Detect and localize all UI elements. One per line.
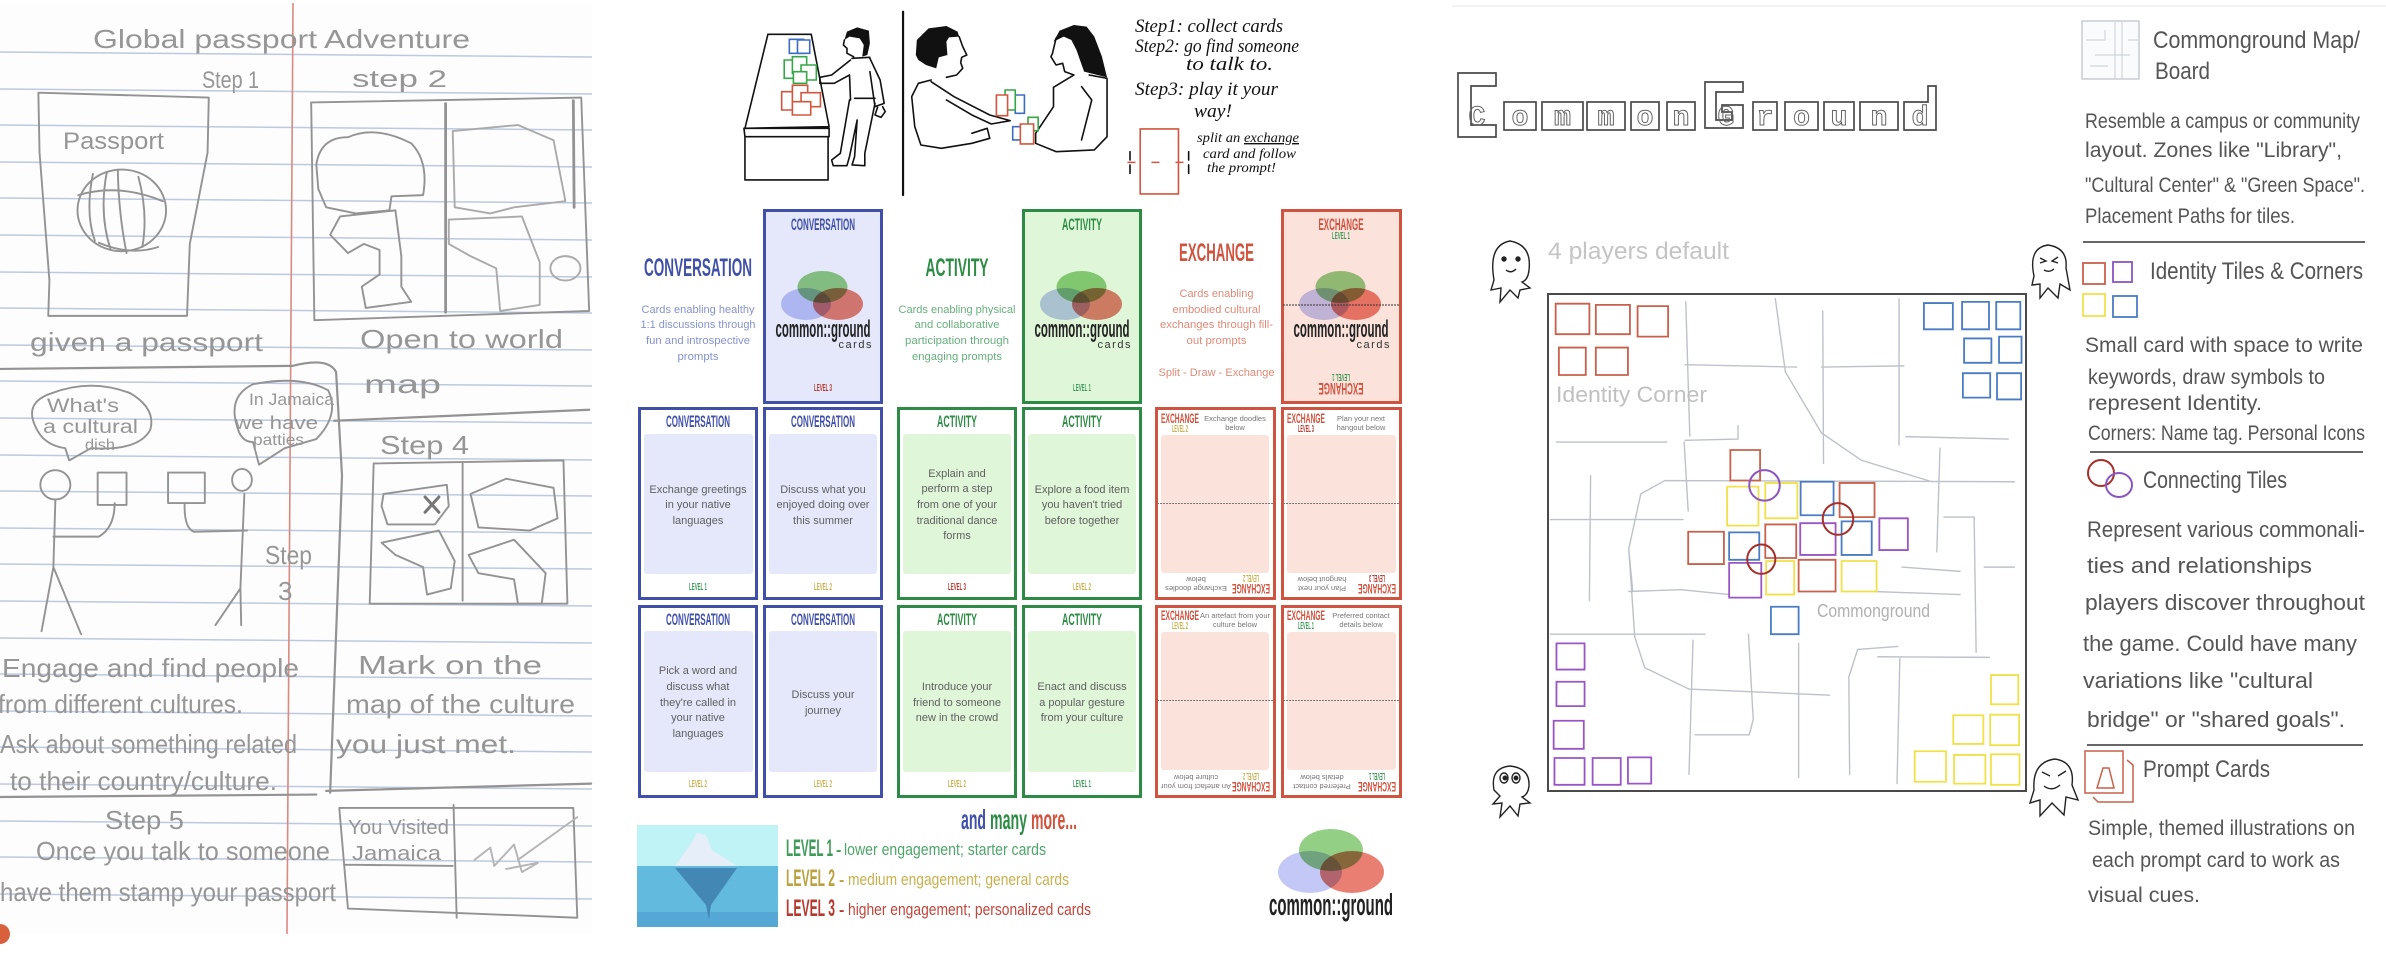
legend: game components list (2082, 21, 2365, 907)
card: exchange greetings: Exchange greetings (649, 484, 747, 496)
item: identity tiles and corners: keywords, draw symbols to (2088, 366, 2325, 389)
item: prompt cards: visual cues. (2088, 884, 2200, 907)
conversation intro: 1:1 discussions through (640, 319, 756, 331)
card: plan your next hangout: EXCHANGE (1358, 581, 1396, 597)
card: introduce your friend: new in the crowd (916, 712, 998, 724)
handwritten how-to-play steps: way! (1194, 101, 1232, 122)
icon: player face top left (1491, 241, 1530, 302)
card: preferred contact details: Preferred contact (1292, 782, 1351, 791)
handwritten notebook captions: to their country/culture. (10, 766, 277, 796)
legend: engagement levels: medium engagement; general cards (848, 870, 1069, 889)
handwritten notebook captions: have them stamp your passport (0, 877, 337, 907)
card: traditional dance: perform a step (922, 483, 992, 495)
card: popular gesture: a popular gesture (1039, 697, 1125, 709)
card: pick a word: your native (671, 712, 725, 724)
item: prompt cards: Simple, themed illustrations on (2088, 817, 2355, 840)
card: discuss what you enjoyed: this summer (793, 515, 853, 527)
logo: common::ground (1269, 829, 1393, 922)
card: exchange greetings: in your native (665, 499, 731, 511)
card: conversation cover: CONVERSATION (791, 216, 855, 234)
handwritten notebook captions: Engage and find people (2, 653, 299, 683)
card: preferred contact details: LEVEL 1 (1369, 770, 1385, 781)
card: traditional dance (898, 408, 1016, 598)
item: connecting tiles: bridge" or "shared goals". (2087, 707, 2345, 732)
item: prompt cards: each prompt card to work as (2092, 849, 2340, 872)
card: food item: ACTIVITY (1062, 413, 1102, 431)
card: discuss your journey: CONVERSATION (791, 611, 855, 629)
handwritten how-to-play steps: Step3: play it your (1135, 79, 1279, 100)
card: conversation cover: LEVEL 3 (814, 383, 832, 394)
card: popular gesture: LEVEL 1 (1073, 779, 1091, 790)
card: traditional dance: LEVEL 3 (948, 582, 966, 593)
heading: and many more: more... (1031, 804, 1077, 835)
board: community map with tiles: Commonground (1817, 601, 1930, 621)
card: plan your next hangout: Plan your next (1337, 414, 1386, 423)
activity intro: ACTIVITY (926, 254, 989, 282)
heading: and many more: and (961, 804, 986, 835)
card: popular gesture (1024, 606, 1140, 796)
card: discuss what you enjoyed: LEVEL 2 (814, 582, 832, 593)
icon: player face bottom left (1493, 766, 1530, 817)
card: food item (1024, 408, 1140, 598)
handwritten how-to-play steps: split an exchange (1197, 131, 1299, 146)
activity intro (898, 254, 1016, 363)
card: exchange doodles: EXCHANGE (1161, 410, 1199, 426)
card: plan your next hangout (1282, 408, 1400, 598)
item: map board: Commonground Map/ (2153, 27, 2360, 54)
card: discuss your journey: Discuss your (792, 689, 855, 701)
board: community map with tiles (1548, 294, 2026, 791)
handwritten notebook captions: you just met. (336, 729, 516, 759)
card: artefact from your culture: culture below (1173, 773, 1218, 782)
handwritten notebook captions: What's (47, 396, 119, 417)
handwritten notebook captions: patties (253, 432, 304, 449)
handwritten notebook captions: Passport (63, 128, 164, 155)
conversation intro: CONVERSATION (644, 254, 752, 282)
card: activity cover: LEVEL 1 (1073, 383, 1091, 394)
card: exchange doodles: below (1225, 423, 1245, 432)
legend: engagement levels: - (839, 902, 844, 919)
card: exchange doodles: EXCHANGE (1232, 581, 1270, 597)
card: exchange doodles: LEVEL 2 (1172, 424, 1188, 435)
legend: engagement levels: LEVEL 3 (786, 895, 835, 922)
card: introduce your friend: friend to someone (913, 697, 1001, 709)
exchange intro (1158, 239, 1274, 379)
card: artefact from your culture: An artefact from your (1160, 782, 1231, 791)
card: pick a word: languages (673, 728, 724, 740)
card: discuss what you enjoyed: Discuss what you (780, 484, 866, 496)
handwritten notebook captions (0, 24, 575, 907)
card: plan your next hangout: hangout below (1297, 575, 1346, 584)
item: connecting tiles: the game. Could have many (2083, 631, 2357, 656)
handwritten notebook captions: Mark on the (358, 650, 542, 680)
handwritten how-to-play steps: Step1: collect cards (1135, 16, 1283, 37)
card: discuss your journey: journey (804, 705, 842, 717)
card: plan your next hangout: EXCHANGE (1287, 410, 1325, 426)
item: map board (2082, 21, 2365, 242)
exchange intro: exchanges through fill- (1160, 319, 1273, 331)
card: preferred contact details: details below (1339, 620, 1383, 629)
card: exchange cover: EXCHANGE (1318, 379, 1364, 397)
card: preferred contact details: EXCHANGE (1358, 779, 1396, 795)
card: activity cover: cards (1098, 339, 1131, 351)
card: exchange cover (1282, 210, 1400, 402)
card: conversation cover (764, 210, 882, 402)
exchange intro: Cards enabling (1180, 288, 1254, 300)
card: exchange cover: EXCHANGE (1318, 216, 1364, 234)
card: activity cover (1024, 210, 1140, 402)
card: traditional dance: from one of your (917, 499, 997, 511)
legend: engagement levels: lower engagement; starter cards (844, 840, 1046, 859)
item: identity tiles and corners: Small card with space to write (2085, 334, 2363, 357)
item: connecting tiles (2083, 460, 2365, 745)
handwritten notebook captions: from different cultures. (0, 689, 243, 719)
card: discuss your journey (764, 606, 882, 796)
handwritten notebook captions: we have (234, 413, 318, 433)
legend: engagement levels: higher engagement; personalized cards (848, 900, 1091, 919)
handwritten how-to-play steps: Step2: go find someone (1135, 36, 1299, 57)
item: prompt cards: Prompt Cards (2143, 756, 2270, 783)
handwritten notebook captions: Ask about something related (0, 729, 297, 759)
card: exchange cover: cards (1356, 339, 1390, 351)
card: plan your next hangout: LEVEL 3 (1298, 424, 1314, 435)
title: CommonGround block lettering: Ground (1718, 103, 1928, 134)
conversation intro: prompts (678, 351, 719, 363)
card: exchange cover: LEVEL 1 (1332, 231, 1350, 242)
panel: Global Passport Adventure notebook sketch (0, 3, 592, 944)
card: artefact from your culture: LEVEL 2 (1172, 621, 1188, 632)
card: preferred contact details: LEVEL 1 (1298, 621, 1314, 632)
card: introduce your friend: Introduce your (922, 681, 992, 693)
card: exchange cover: LEVEL 1 (1332, 371, 1350, 382)
board: community map with tiles: Identity Corner (1556, 382, 1707, 407)
card: discuss what you enjoyed (764, 408, 882, 598)
card: pick a word: discuss what (667, 681, 729, 693)
card: traditional dance: ACTIVITY (937, 413, 977, 431)
illustration: collecting cards and exchanging them (744, 12, 1192, 195)
legend: engagement levels (786, 835, 1091, 922)
panel: CommonGround board game sketch (1452, 5, 2386, 907)
card: discuss what you enjoyed: enjoyed doing over (777, 499, 870, 511)
title: CommonGround block lettering (1458, 73, 1936, 137)
card: popular gesture: Enact and discuss (1037, 681, 1127, 693)
card: exchange doodles: Exchange doodles (1204, 414, 1266, 423)
item: prompt cards (2085, 751, 2355, 907)
card: exchange doodles: below (1186, 575, 1206, 584)
handwritten notebook captions: 3 (278, 576, 292, 606)
card: pick a word: CONVERSATION (666, 611, 730, 629)
handwritten notebook captions: step 2 (352, 66, 447, 93)
item: connecting tiles: Connecting Tiles (2143, 467, 2287, 494)
card: artefact from your culture: An artefact from your (1200, 611, 1271, 620)
handwritten notebook captions: Open to world (360, 324, 563, 354)
item: connecting tiles: players discover throughout (2085, 590, 2365, 615)
activity intro: and collaborative (914, 319, 1000, 331)
card: exchange doodles: LEVEL 2 (1243, 572, 1259, 583)
card: introduce your friend (898, 606, 1016, 796)
card: exchange cover: common::ground (1294, 316, 1388, 343)
exchange intro: Split - Draw - Exchange (1158, 367, 1274, 379)
label: 4 players default: 4 players default (1548, 238, 1729, 265)
card: food item: LEVEL 2 (1073, 582, 1091, 593)
handwritten notebook captions: Step 1 (202, 67, 259, 94)
title: CommonGround block lettering: Common (1469, 103, 1689, 134)
exchange intro: EXCHANGE (1179, 239, 1254, 267)
panel: common::ground cards overview: common::ground (1269, 887, 1393, 922)
card: artefact from your culture: EXCHANGE (1232, 779, 1270, 795)
icon: player face top right (2032, 245, 2070, 298)
card: exchange greetings (640, 408, 756, 598)
card: conversation cover: cards (838, 339, 872, 351)
handwritten notebook captions: map of the culture (346, 689, 575, 719)
card: popular gesture: ACTIVITY (1062, 611, 1102, 629)
handwritten how-to-play steps: to talk to. (1186, 54, 1273, 75)
handwritten notebook captions: In Jamaica (249, 390, 335, 409)
item: identity tiles and corners: represent Identity. (2088, 392, 2262, 415)
exchange intro: out prompts (1186, 335, 1247, 347)
card: exchange greetings: LEVEL 1 (689, 582, 707, 593)
item: map board: layout. Zones like "Library", (2085, 139, 2342, 162)
card: food item: you haven't tried (1042, 499, 1122, 511)
heading: and many more (961, 804, 1077, 835)
icon: iceberg (637, 825, 778, 927)
card: exchange greetings: languages (673, 515, 724, 527)
handwritten how-to-play steps: card and follow (1203, 147, 1297, 162)
card: exchange greetings: CONVERSATION (666, 413, 730, 431)
exchange intro: embodied cultural (1172, 304, 1260, 316)
handwritten notebook captions: Step 5 (105, 805, 184, 835)
card: traditional dance: forms (943, 530, 971, 542)
card: plan your next hangout: hangout below (1337, 423, 1386, 432)
card: artefact from your culture (1156, 606, 1274, 796)
handwritten notebook captions: Once you talk to someone (36, 836, 330, 866)
card: preferred contact details: Preferred contact (1332, 611, 1391, 620)
activity intro: participation through (905, 335, 1009, 347)
card: artefact from your culture: EXCHANGE (1161, 607, 1199, 623)
card: artefact from your culture: LEVEL 2 (1243, 770, 1259, 781)
card: plan your next hangout: Plan your next (1297, 584, 1346, 593)
card: preferred contact details: EXCHANGE (1287, 607, 1325, 623)
card: exchange doodles (1156, 408, 1274, 598)
card: introduce your friend: LEVEL 2 (948, 779, 966, 790)
heading: and many more: many (990, 804, 1027, 835)
card: discuss your journey: LEVEL 2 (814, 779, 832, 790)
handwritten notebook captions: You Visited (348, 817, 449, 839)
activity intro: Cards enabling physical (898, 304, 1016, 316)
handwritten how-to-play steps (1135, 16, 1299, 176)
legend: engagement levels: LEVEL 1 (786, 835, 833, 862)
conversation intro (640, 254, 756, 363)
card: pick a word: they're called in (660, 697, 736, 709)
handwritten how-to-play steps: the prompt! (1207, 161, 1276, 176)
handwritten notebook captions: Global passport Adventure (93, 24, 470, 54)
card: discuss what you enjoyed: CONVERSATION (791, 413, 855, 431)
card: introduce your friend: ACTIVITY (937, 611, 977, 629)
item: map board: Placement Paths for tiles. (2085, 205, 2295, 228)
legend: engagement levels: - (839, 872, 844, 889)
item: connecting tiles: Represent various commonali- (2087, 517, 2365, 542)
card: conversation cover: common::ground (776, 316, 870, 343)
item: connecting tiles: variations like "cultural (2083, 668, 2313, 693)
card: activity cover: ACTIVITY (1062, 216, 1102, 234)
card: activity cover: common::ground (1034, 316, 1130, 343)
handwritten notebook captions: Jamaica (352, 843, 442, 865)
card: preferred contact details: details below (1300, 773, 1344, 782)
activity intro: engaging prompts (912, 351, 1002, 363)
handwritten notebook captions: map (364, 369, 441, 399)
icon: player face bottom right (2030, 759, 2078, 816)
card: traditional dance: traditional dance (917, 515, 997, 527)
card: pick a word (640, 606, 756, 796)
item: connecting tiles: ties and relationships (2087, 553, 2312, 578)
handwritten notebook captions: given a passport (30, 327, 264, 357)
handwritten notebook captions: Step (265, 540, 312, 570)
handwritten notebook captions: dish (85, 437, 115, 454)
legend: engagement levels: LEVEL 2 (786, 865, 835, 892)
card: food item: before together (1045, 515, 1120, 527)
card: exchange doodles: Exchange doodles (1165, 584, 1227, 593)
card: preferred contact details (1282, 606, 1400, 796)
card: artefact from your culture: culture below (1213, 620, 1258, 629)
conversation intro: fun and introspective (646, 335, 750, 347)
sketch drawings: passport, maps, stick figures, stamp (0, 93, 591, 918)
legend: engagement levels: - (836, 842, 841, 859)
card: food item: Explore a food item (1035, 484, 1129, 496)
conversation intro: Cards enabling healthy (642, 304, 755, 316)
card: pick a word: LEVEL 2 (689, 779, 707, 790)
card: plan your next hangout: LEVEL 3 (1369, 572, 1385, 583)
panel: common::ground cards overview (637, 12, 1400, 927)
card: traditional dance: Explain and (928, 468, 986, 480)
item: identity tiles and corners (2083, 258, 2365, 452)
handwritten notebook captions: Step 4 (380, 430, 469, 460)
card: pick a word: Pick a word and (659, 665, 737, 677)
card: popular gesture: from your culture (1041, 712, 1123, 724)
handwritten notebook captions: a cultural (43, 417, 138, 438)
item: map board: Board (2155, 58, 2210, 85)
